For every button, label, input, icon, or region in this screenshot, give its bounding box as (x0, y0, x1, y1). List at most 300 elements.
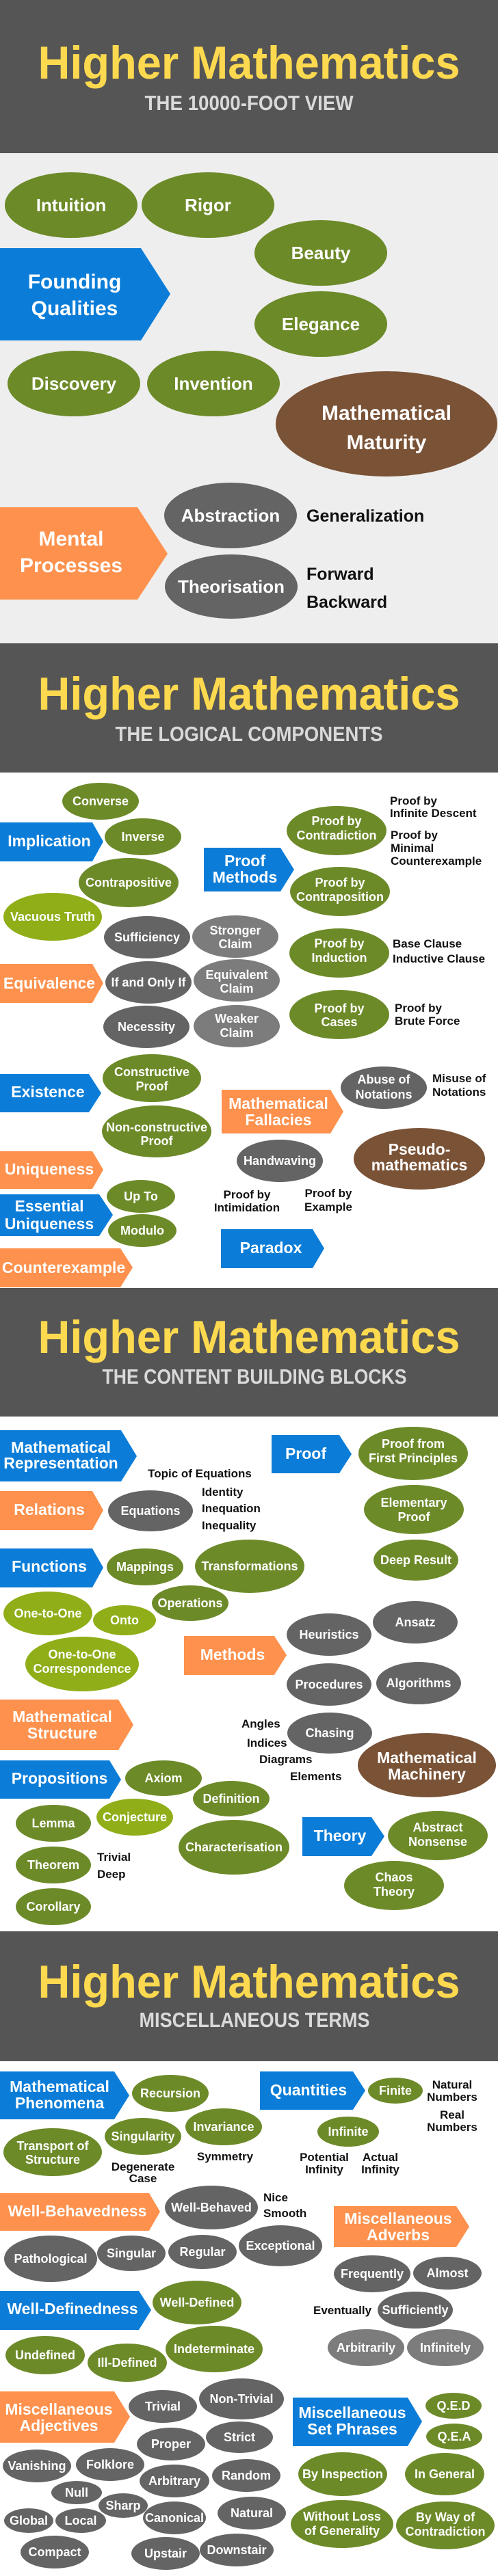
text: Base Clause Inductive Clause: Inductive Clause (393, 952, 485, 965)
ellipse: Invention (147, 351, 280, 416)
text: Proof by Minimal Counterexample: Minimal (391, 842, 434, 855)
ellipse: Undefined (5, 2336, 85, 2374)
ellipse: Mathematical Maturity: Mathematical (322, 402, 451, 425)
ellipse: Proof by Contraposition: Proof by (315, 876, 365, 889)
ellipse: By Way of Contradiction: Contradiction (405, 2525, 486, 2538)
header: section 1 (0, 0, 498, 153)
arrow: Mathematical Phenomena: Mathematical (10, 2078, 109, 2095)
arrow: Proof Methods: Methods (213, 868, 277, 886)
ellipse: Upstair (131, 2537, 200, 2570)
text: Proof by Brute Force: Brute Force (395, 1015, 460, 1028)
ellipse: Proof by Cases: Proof by (314, 1002, 365, 1015)
ellipse: Constructive Proof: Proof (135, 1079, 169, 1093)
ellipse: Q.E.D (425, 2393, 482, 2419)
arrow: Counterexample (0, 1248, 133, 1287)
ellipse: Singular (97, 2236, 166, 2271)
text: Natural Numbers: Natural (432, 2078, 472, 2091)
ellipse: Chaos Theory: Chaos (375, 1870, 413, 1884)
text: Base Clause Inductive Clause: Base Clause (393, 937, 462, 950)
ellipse: Abuse of Notations: Notations (356, 1088, 412, 1101)
text: Misuse of Notations (432, 1072, 486, 1099)
ellipse: Stronger Claim: Claim (218, 937, 252, 951)
ellipse: Beauty: Beauty (291, 243, 351, 263)
ellipse: Finite: Finite (379, 2084, 412, 2097)
ellipse: Mathematical Machinery: Machinery (388, 1765, 466, 1783)
text: Actual Infinity (361, 2151, 399, 2176)
arrow: Founding Qualities: Qualities (31, 297, 118, 320)
ellipse: Pathological (4, 2236, 97, 2282)
arrow: Relations (0, 1491, 103, 1530)
text: Angles Indices Diagrams Elements (241, 1717, 342, 1783)
ellipse: Weaker Claim: Claim (220, 1026, 254, 1040)
arrow: Mathematical Structure: Mathematical (12, 1708, 112, 1726)
ellipse: Null (51, 2481, 102, 2504)
arrow: Functions (0, 1548, 103, 1587)
arrow: Uniqueness (0, 1151, 103, 1189)
ellipse: Compact: Compact (28, 2545, 81, 2559)
ellipse: If and Only If (105, 961, 192, 1004)
ellipse: One-to-One Correspondence: One-to-One (48, 1648, 116, 1661)
arrow: Miscellaneous Adverbs (334, 2206, 469, 2247)
arrow: Well-Definedness (0, 2291, 151, 2330)
subtitle: THE CONTENT BUILDING BLOCKS (103, 1365, 406, 1388)
ellipse: By Inspection (298, 2452, 387, 2496)
ellipse: Arbitrarily: Arbitrarily (337, 2341, 395, 2354)
ellipse: Upstair: Upstair (144, 2547, 187, 2560)
ellipse: Algorithms: Algorithms (386, 1676, 451, 1690)
ellipse: Heuristics: Heuristics (299, 1628, 359, 1641)
arrow: Miscellaneous Set Phrases (293, 2398, 422, 2446)
ellipse: Constructive Proof: Constructive (114, 1065, 189, 1079)
arrow: Proof (272, 1435, 352, 1473)
text: Proof by Intimidation: Proof by (224, 1188, 271, 1201)
ellipse: Pseudo-mathematics: Pseudo- (389, 1140, 450, 1158)
ellipse: Abstract Nonsense (388, 1811, 488, 1860)
ellipse: Vacuous Truth: Vacuous Truth (10, 910, 95, 924)
arrow: Mental Processes: Mental (38, 528, 104, 550)
ellipse: In General: In General (415, 2467, 475, 2481)
ellipse: Necessity: Necessity (118, 1020, 175, 1034)
ellipse: Onto: Onto (110, 1613, 139, 1627)
ellipse: Infinite (317, 2117, 379, 2147)
ellipse: Null: Null (65, 2486, 88, 2499)
arrow: Implication: Implication (8, 832, 91, 850)
ellipse: Exceptional: Exceptional (246, 2239, 315, 2253)
ellipse: Abuse of Notations: Abuse of (357, 1073, 410, 1086)
text: Nice Smooth: Nice (263, 2191, 288, 2204)
ellipse: Almost: Almost (426, 2266, 469, 2280)
ellipse: Ansatz: Ansatz (395, 1615, 436, 1629)
ellipse: Infinitely (407, 2329, 484, 2366)
arrow: Miscellaneous Adjectives: Miscellaneous (5, 2400, 113, 2418)
subtitle: THE 10000-FOOT VIEW (145, 91, 354, 115)
ellipse: Almost (413, 2257, 482, 2290)
ellipse: Arbitrarily (328, 2329, 404, 2366)
ellipse: Ill-Defined: Ill-Defined (97, 2356, 157, 2370)
ellipse: Deep Result: Deep Result (380, 1553, 451, 1567)
text: Eventually: Eventually (313, 2304, 372, 2317)
ellipse: Discovery: Discovery (31, 373, 117, 394)
ellipse: Corollary (16, 1888, 91, 1925)
ellipse: Chaos Theory: Theory (374, 1885, 415, 1899)
ellipse: Without Loss of Generality: of Generality (304, 2524, 380, 2538)
text: Angles Indices Diagrams Elements: Angles (241, 1717, 280, 1730)
ellipse: Rigor (142, 172, 274, 238)
text: Nice Smooth (263, 2191, 306, 2220)
ellipse: Algorithms (376, 1662, 461, 1704)
title: Higher Mathematics (38, 37, 460, 89)
ellipse: Proof by Cases (289, 990, 389, 1039)
ellipse: Elementary Proof (364, 1485, 464, 1534)
ellipse: Infinitely: Infinitely (420, 2341, 471, 2354)
arrow: Founding Qualities: Founding (28, 271, 121, 293)
arrow: Mathematical Phenomena: Phenomena (15, 2094, 104, 2112)
arrow: Equivalence (0, 964, 103, 1003)
ellipse: Invariance: Invariance (193, 2120, 254, 2134)
text: Degenerate Case (112, 2160, 174, 2185)
text: Forward Backward: Forward (306, 565, 374, 584)
text: Natural Numbers: Numbers (427, 2091, 477, 2104)
ellipse: Inverse (105, 818, 181, 855)
text: Identity Inequation Inequality: Inequality (202, 1519, 257, 1532)
text: Proof by Example: Example (304, 1200, 352, 1213)
arrow: Well-Behavedness (0, 2193, 160, 2231)
ellipse: Indeterminate: Indeterminate (174, 2342, 254, 2356)
arrow: Implication (0, 822, 103, 861)
arrow: Propositions (0, 1760, 121, 1799)
ellipse: Well-Defined: Well-Defined (160, 2296, 234, 2309)
arrow: Existence (0, 1074, 101, 1112)
ellipse: Mappings (107, 1548, 183, 1585)
arrow: Mathematical Representation (0, 1430, 137, 1481)
text: Proof by Intimidation: Intimidation (214, 1201, 280, 1214)
arrow: Methods: Methods (200, 1646, 265, 1663)
ellipse: One-to-One (3, 1592, 92, 1635)
arrow: Essential Uniqueness: Uniqueness (5, 1215, 94, 1233)
arrow: Mathematical Structure (0, 1700, 133, 1750)
ellipse: Abuse of Notations (341, 1066, 427, 1109)
ellipse: Global: Global (10, 2514, 48, 2527)
ellipse: Local: Local (64, 2514, 97, 2527)
ellipse: Theorisation: Theorisation (178, 576, 285, 597)
subtitle: THE LOGICAL COMPONENTS (115, 722, 383, 746)
ellipse: Sufficiently (378, 2292, 453, 2329)
ellipse: Elegance (254, 291, 387, 357)
ellipse: Proof from First Principles: First Principles (369, 1451, 458, 1465)
text: Actual Infinity: Actual (363, 2151, 398, 2164)
text: Symmetry: Symmetry (197, 2150, 254, 2163)
arrow: Functions: Functions (12, 1557, 87, 1575)
text: Proof by Infinite Descent: Proof by (390, 794, 437, 807)
ellipse: Downstair (200, 2534, 274, 2566)
ellipse: Frequently: Frequently (341, 2267, 404, 2281)
arrow: Mathematical Representation: Mathematical (11, 1438, 111, 1456)
text: Proof by Example: Proof by (305, 1187, 352, 1200)
text: Angles Indices Diagrams Elements: Elements (290, 1770, 342, 1783)
ellipse: Mappings: Mappings (116, 1560, 174, 1574)
ellipse: Local (55, 2508, 106, 2533)
ellipse: Equivalent Claim (194, 959, 280, 1002)
ellipse: Transformations (195, 1540, 304, 1593)
ellipse: Stronger Claim (192, 915, 278, 958)
ellipse: Operations (152, 1585, 228, 1621)
ellipse: Singularity: Singularity (111, 2130, 175, 2143)
arrow: Theory: Theory (314, 1827, 367, 1844)
ellipse: Folklore (76, 2448, 144, 2481)
ellipse: Without Loss of Generality: Without Loss (303, 2510, 381, 2523)
arrow: Mathematical Structure: Structure (27, 1724, 97, 1742)
arrow: Miscellaneous Set Phrases: Miscellaneous (298, 2404, 406, 2421)
ellipse: Chaos Theory (344, 1861, 444, 1910)
ellipse: Compact (21, 2536, 89, 2568)
ellipse: Converse (62, 783, 139, 820)
text: Proof by Minimal Counterexample: Proof by (391, 829, 438, 842)
text: Nice Smooth: Smooth (263, 2207, 306, 2220)
ellipse: Q.E.D: Q.E.D (436, 2399, 471, 2413)
ellipse: Transport of Structure (3, 2128, 102, 2176)
ellipse: Canonical: Canonical (145, 2511, 204, 2525)
arrow: Mathematical Fallacies (222, 1090, 343, 1133)
ellipse: Q.E.A: Q.E.A (437, 2430, 471, 2443)
ellipse: Non-constructive Proof (102, 1105, 211, 1157)
ellipse: Abstract Nonsense: Nonsense (408, 1835, 467, 1849)
text: Trivial Deep: Trivial (97, 1851, 131, 1864)
ellipse: Canonical (143, 2501, 206, 2534)
ellipse: Onto (93, 1605, 156, 1635)
ellipse: Proof by Induction: Induction (312, 951, 367, 965)
text: Base Clause Inductive Clause (393, 937, 485, 965)
ellipse: Elementary Proof: Proof (398, 1510, 431, 1524)
title: Higher Mathematics (38, 668, 460, 720)
text: Actual Infinity: Infinity (361, 2163, 399, 2176)
ellipse: Lemma (16, 1805, 91, 1842)
ellipse: Proof by Induction (289, 928, 389, 978)
text: Proof by Brute Force (395, 1002, 460, 1028)
ellipse: Beauty (254, 220, 387, 286)
arrow: Mathematical Fallacies: Mathematical (228, 1095, 328, 1112)
ellipse: Strict: Strict (224, 2430, 255, 2444)
ellipse: Definition: Definition (202, 1792, 260, 1806)
arrow: Counterexample: Counterexample (2, 1259, 125, 1276)
ellipse: Vanishing (3, 2450, 71, 2482)
ellipse: Stronger Claim: Stronger (209, 924, 261, 937)
text: Misuse of Notations: Notations (432, 1086, 486, 1099)
ellipse: Infinite: Infinite (328, 2125, 368, 2138)
ellipse: Operations: Operations (157, 1596, 223, 1610)
text: Degenerate Case: Case (129, 2172, 157, 2185)
ellipse: One-to-One: One-to-One (14, 1607, 82, 1620)
arrow: Miscellaneous Adjectives (0, 2391, 130, 2443)
ellipse: Pathological: Pathological (14, 2252, 88, 2266)
text: Proof by Example (304, 1187, 352, 1213)
text: Real Numbers: Real (440, 2108, 464, 2121)
ellipse: Well-Behaved (165, 2186, 258, 2229)
ellipse: By Way of Contradiction: By Way of (416, 2510, 475, 2524)
ellipse: Without Loss of Generality (291, 2500, 393, 2548)
ellipse: Definition (193, 1781, 270, 1816)
ellipse: Sufficiency (104, 916, 190, 958)
arrow: Paradox: Paradox (240, 1239, 302, 1257)
ellipse: Equations (108, 1490, 193, 1531)
ellipse: Proof from First Principles: Proof from (382, 1437, 445, 1451)
ellipse: Arbitrary (140, 2465, 209, 2497)
ellipse: Ill-Defined (88, 2344, 167, 2382)
arrow: Mental Processes (0, 507, 168, 600)
ellipse: Arbitrary: Arbitrary (148, 2474, 200, 2488)
ellipse: Non-Trivial: Non-Trivial (209, 2392, 274, 2406)
ellipse: Procedures: Procedures (295, 1678, 363, 1691)
ellipse: In General (405, 2453, 484, 2495)
ellipse: Exceptional (239, 2225, 322, 2266)
ellipse: Proof by Cases: Cases (321, 1015, 358, 1029)
ellipse: Deep Result (374, 1540, 458, 1581)
text: Topic of Equations: Topic of Equations (148, 1467, 252, 1480)
ellipse: Mathematical Maturity: Maturity (347, 431, 427, 454)
ellipse: Recursion: Recursion (140, 2087, 200, 2100)
text: Identity Inequation Inequality: Inequation (202, 1502, 261, 1515)
ellipse: Invariance (185, 2108, 262, 2145)
text: Angles Indices Diagrams Elements: Diagrams (259, 1753, 312, 1766)
arrow: Well-Behavedness: Well-Behavedness (8, 2202, 146, 2220)
ellipse: Pseudo-mathematics: mathematics (371, 1156, 467, 1174)
text: Generalization: Generalization (306, 507, 424, 526)
ellipse: Q.E.A (426, 2424, 482, 2450)
text: Proof by Intimidation (214, 1188, 280, 1214)
text: Misuse of Notations: Misuse of (432, 1072, 486, 1085)
ellipse: Contrapositive (79, 858, 179, 907)
ellipse: Converse: Converse (73, 794, 129, 808)
arrow: Miscellaneous Set Phrases: Set Phrases (307, 2420, 397, 2438)
arrow: Proof: Proof (285, 1445, 326, 1462)
ellipse: Natural: Natural (231, 2506, 273, 2520)
ellipse: Trivial: Trivial (145, 2400, 181, 2413)
ellipse: Proof by Contraposition (290, 867, 390, 916)
ellipse: Sharp: Sharp (105, 2499, 141, 2512)
arrow: Paradox (221, 1229, 324, 1268)
ellipse: Non-constructive Proof: Proof (141, 1134, 174, 1148)
ellipse: Intuition: Intuition (36, 195, 106, 215)
ellipse: Theorem (16, 1847, 91, 1883)
ellipse: Characterisation: Characterisation (185, 1840, 283, 1854)
ellipse: Conjecture (96, 1799, 173, 1836)
ellipse: Necessity (103, 1006, 189, 1048)
ellipse: Axiom: Axiom (144, 1771, 183, 1785)
ellipse: Theorem: Theorem (27, 1858, 79, 1872)
ellipse: Trivial (129, 2390, 197, 2423)
arrow: Well-Definedness: Well-Definedness (7, 2300, 138, 2318)
ellipse: Up To: Up To (124, 1190, 158, 1203)
arrow: Miscellaneous Adjectives: Adjectives (19, 2417, 99, 2434)
ellipse: Regular (168, 2235, 237, 2269)
ellipse: Singular: Singular (107, 2246, 156, 2260)
ellipse: Heuristics (287, 1613, 371, 1656)
ellipse: Transformations: Transformations (201, 1559, 298, 1573)
header: section 4 (0, 1931, 498, 2061)
ellipse: Mathematical Machinery: Mathematical (377, 1749, 477, 1767)
ellipse: Natural (218, 2497, 286, 2530)
ellipse: Transport of Structure: Structure (25, 2153, 80, 2166)
ellipse: Rigor: Rigor (185, 195, 231, 215)
text: Angles Indices Diagrams Elements: Indices (247, 1736, 287, 1749)
arrow: Quantities (260, 2071, 365, 2110)
ellipse: Well-Behaved: Well-Behaved (171, 2201, 252, 2214)
ellipse: Proof from First Principles (358, 1427, 468, 1480)
arrow: Essential Uniqueness: Essential (15, 1197, 83, 1215)
ellipse: Chasing: Chasing (305, 1726, 354, 1740)
ellipse: Corollary: Corollary (26, 1900, 81, 1914)
ellipse: Procedures (287, 1663, 371, 1706)
ellipse: Inverse: Inverse (121, 830, 165, 844)
arrow: Essential Uniqueness (0, 1194, 113, 1236)
ellipse: Sufficiency: Sufficiency (114, 930, 180, 944)
ellipse: Pseudo-mathematics (354, 1128, 485, 1190)
text: Potential Infinity (300, 2151, 349, 2176)
ellipse: Axiom (125, 1760, 202, 1796)
arrow: Mathematical Representation: Representation (3, 1454, 118, 1472)
title: Higher Mathematics (38, 1956, 460, 2008)
ellipse: Constructive Proof (103, 1054, 201, 1102)
title: Higher Mathematics (38, 1311, 460, 1363)
text: Forward Backward: Backward (306, 593, 387, 612)
text: Trivial Deep (97, 1851, 131, 1881)
ellipse: Equivalent Claim: Claim (220, 982, 254, 995)
header: section 3 (0, 1288, 498, 1417)
ellipse: Random: Random (222, 2469, 271, 2482)
ellipse: Chasing (287, 1713, 372, 1754)
text: Real Numbers (427, 2108, 477, 2134)
ellipse: One-to-One Correspondence (25, 1637, 139, 1691)
ellipse: Proof by Induction: Proof by (314, 937, 365, 950)
text: Degenerate Case: Degenerate (112, 2160, 174, 2173)
ellipse: Proof by Contradiction: Proof by (311, 814, 362, 828)
arrow: Propositions: Propositions (12, 1769, 107, 1787)
ellipse: Abstract Nonsense: Abstract (412, 1821, 463, 1834)
ellipse: One-to-One Correspondence: Correspondence (33, 1662, 131, 1676)
ellipse: Abstraction: Abstraction (181, 505, 280, 526)
ellipse: Modulo (108, 1214, 176, 1247)
ellipse: Well-Defined (153, 2281, 241, 2324)
text: Potential Infinity: Potential (300, 2151, 349, 2164)
ellipse: Discovery (8, 351, 140, 416)
arrow: Relations: Relations (14, 1501, 85, 1518)
ellipse: If and Only If: If and Only If (111, 976, 186, 989)
ellipse: Sufficiently: Sufficiently (382, 2303, 449, 2317)
ellipse: Vacuous Truth (3, 893, 102, 941)
ellipse: Regular: Regular (179, 2245, 226, 2259)
text: Proof by Brute Force: Proof by (395, 1002, 442, 1015)
text: Proof by Infinite Descent: Infinite Descent (390, 807, 477, 820)
text: Real Numbers: Numbers (427, 2121, 477, 2134)
ellipse: Equivalent Claim: Equivalent (205, 968, 268, 982)
ellipse: Handwaving: Handwaving (244, 1154, 316, 1168)
arrow: Mental Processes: Processes (20, 554, 122, 577)
ellipse: Singularity (105, 2118, 181, 2155)
ellipse: Frequently (334, 2255, 410, 2292)
subtitle: MISCELLANEOUS TERMS (140, 2008, 369, 2032)
ellipse: Non-Trivial (199, 2378, 284, 2419)
ellipse: Proof by Contraposition: Contraposition (296, 890, 384, 904)
ellipse: By Way of Contradiction (396, 2501, 495, 2549)
text: Proof by Minimal Counterexample: Counterexample (391, 855, 482, 868)
text: Identity Inequation Inequality (202, 1486, 261, 1532)
text: Forward Backward (306, 565, 387, 612)
ellipse: Lemma: Lemma (31, 1816, 75, 1830)
ellipse: Global (4, 2508, 53, 2533)
ellipse: Proper: Proper (151, 2437, 191, 2451)
ellipse: Elegance: Elegance (282, 314, 360, 334)
arrow: Existence: Existence (11, 1083, 85, 1101)
text: Identity Inequation Inequality: Identity (202, 1486, 244, 1499)
